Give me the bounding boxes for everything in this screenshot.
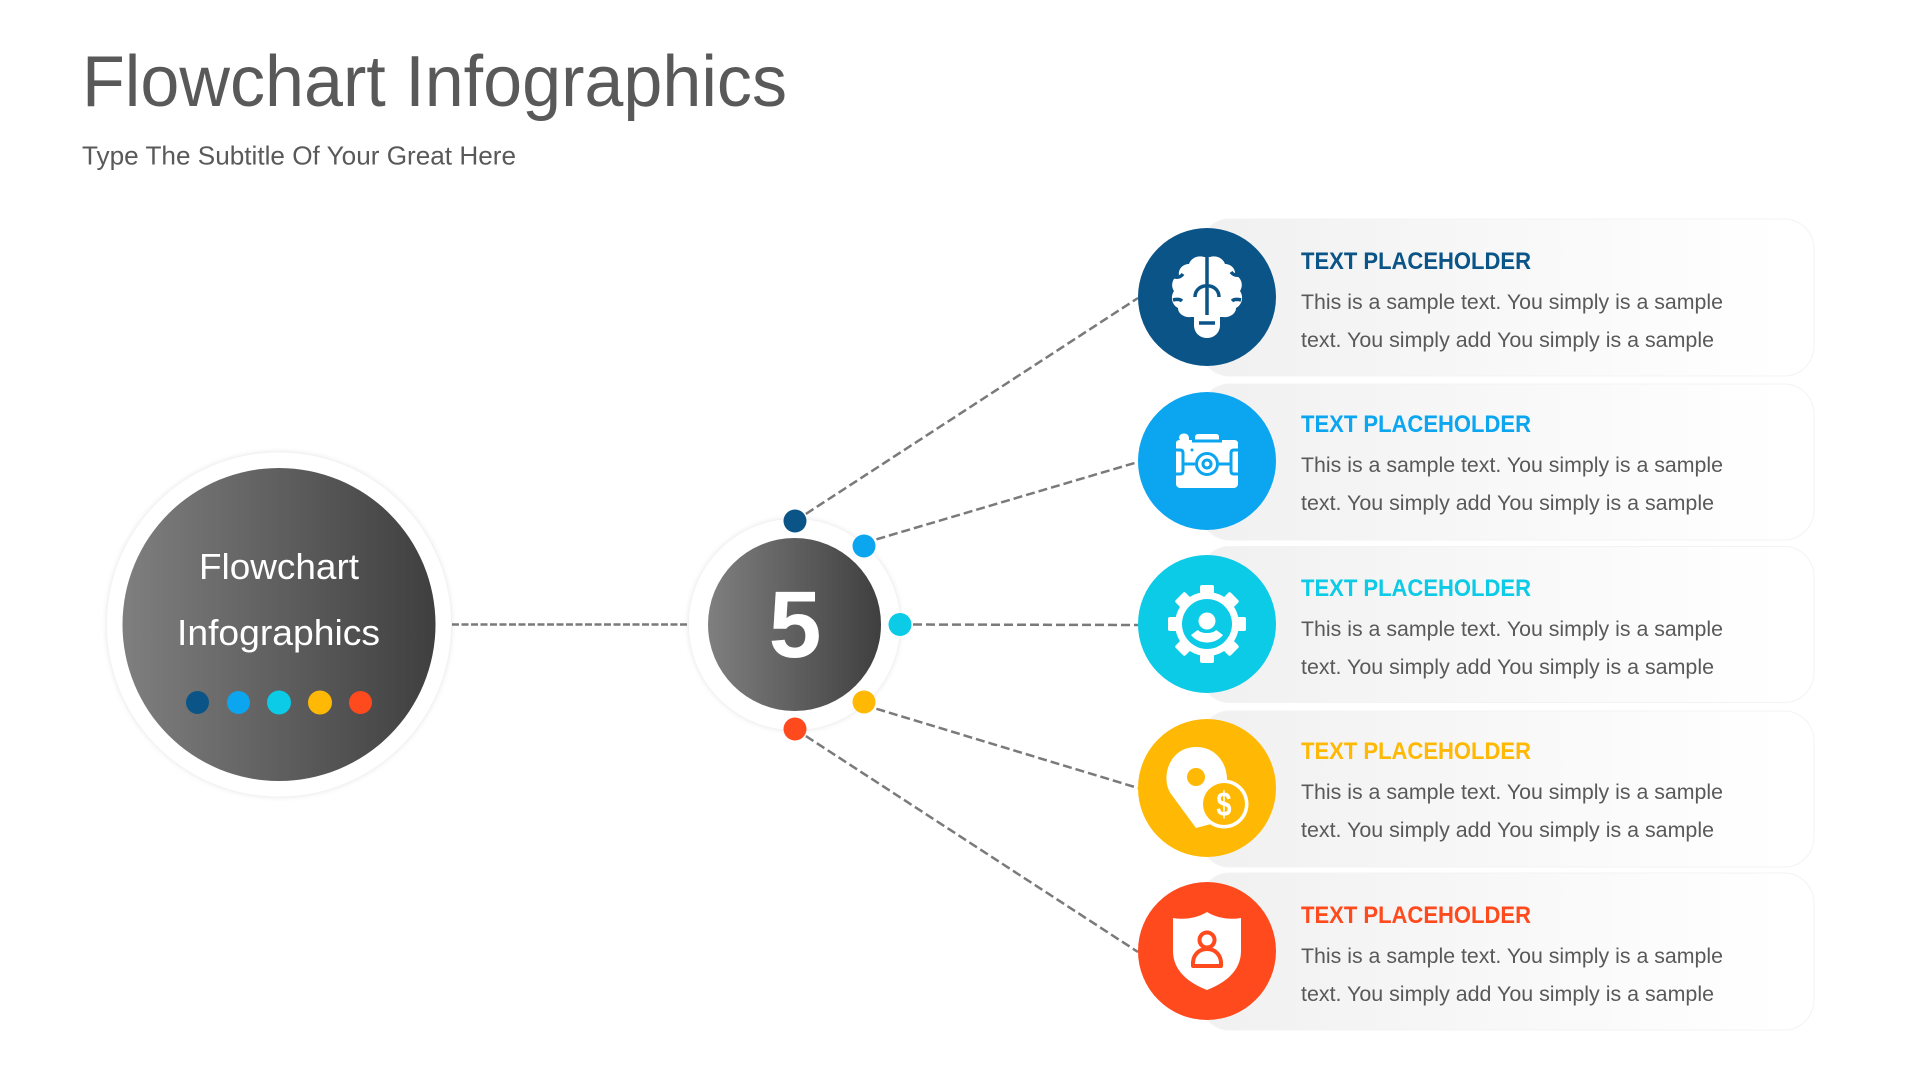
panel: item 2 <box>1138 384 1814 540</box>
main circle label line 1: Flowchart <box>199 546 359 587</box>
body 5: text. You simply add You simply is a sample <box>1301 983 1714 1006</box>
body 2: text. You simply add You simply is a sample <box>1301 492 1714 515</box>
panel: item 3 <box>1138 546 1814 702</box>
body 1: This is a sample text. You simply is a sample <box>1301 291 1723 314</box>
icon: map pin with dollar coin <box>1138 719 1276 857</box>
body 2: This is a sample text. You simply is a sample <box>1301 454 1723 477</box>
icon: shield with person <box>1138 882 1276 1020</box>
heading 4: TEXT PLACEHOLDER <box>1301 738 1531 765</box>
hub number: 5 <box>769 572 821 678</box>
heading 2: TEXT PLACEHOLDER <box>1301 411 1531 438</box>
body 3: text. You simply add You simply is a sample <box>1301 656 1714 679</box>
icon: map pin with dollar coin: $ <box>1216 785 1232 824</box>
heading 3: TEXT PLACEHOLDER <box>1301 575 1531 602</box>
main circle: Flowchart Infographics <box>107 452 451 796</box>
hub dot 1 <box>784 510 806 532</box>
body 4: This is a sample text. You simply is a sample <box>1301 781 1723 804</box>
icon: camera <box>1138 392 1276 530</box>
connector: hub to item 2 <box>864 462 1138 543</box>
heading 5: TEXT PLACEHOLDER <box>1301 902 1531 929</box>
main circle label line 2: Infographics <box>177 612 380 653</box>
heading 1: TEXT PLACEHOLDER <box>1301 248 1531 275</box>
icon: brain bulb <box>1138 228 1276 366</box>
hub dot 2 <box>852 534 876 558</box>
icon: gear with person <box>1138 555 1276 693</box>
connector: hub to item 4 <box>864 705 1138 788</box>
connector: hub to item 3 <box>900 623 1138 626</box>
subtitle: Type The Subtitle Of Your Great Here <box>82 140 516 170</box>
main circle colour dots <box>186 690 372 714</box>
title: Flowchart Infographics <box>82 42 787 122</box>
hub dot 4 <box>852 690 876 714</box>
panel: item 1 <box>1138 219 1814 376</box>
body 5: This is a sample text. You simply is a sample <box>1301 945 1723 968</box>
body 4: text. You simply add You simply is a sample <box>1301 819 1714 842</box>
connector: hub to item 1 <box>795 298 1138 521</box>
panel: item 4 <box>1138 711 1814 867</box>
panel: item 5 <box>1138 873 1814 1030</box>
hub circle: number 5 <box>689 510 912 740</box>
connector: main circle to hub <box>452 623 690 626</box>
connector: hub to item 5 <box>795 729 1138 952</box>
hub dot 5 <box>784 718 806 740</box>
body 3: This is a sample text. You simply is a sample <box>1301 618 1723 641</box>
hub dot 3 <box>888 613 912 636</box>
body 1: text. You simply add You simply is a sample <box>1301 329 1714 352</box>
